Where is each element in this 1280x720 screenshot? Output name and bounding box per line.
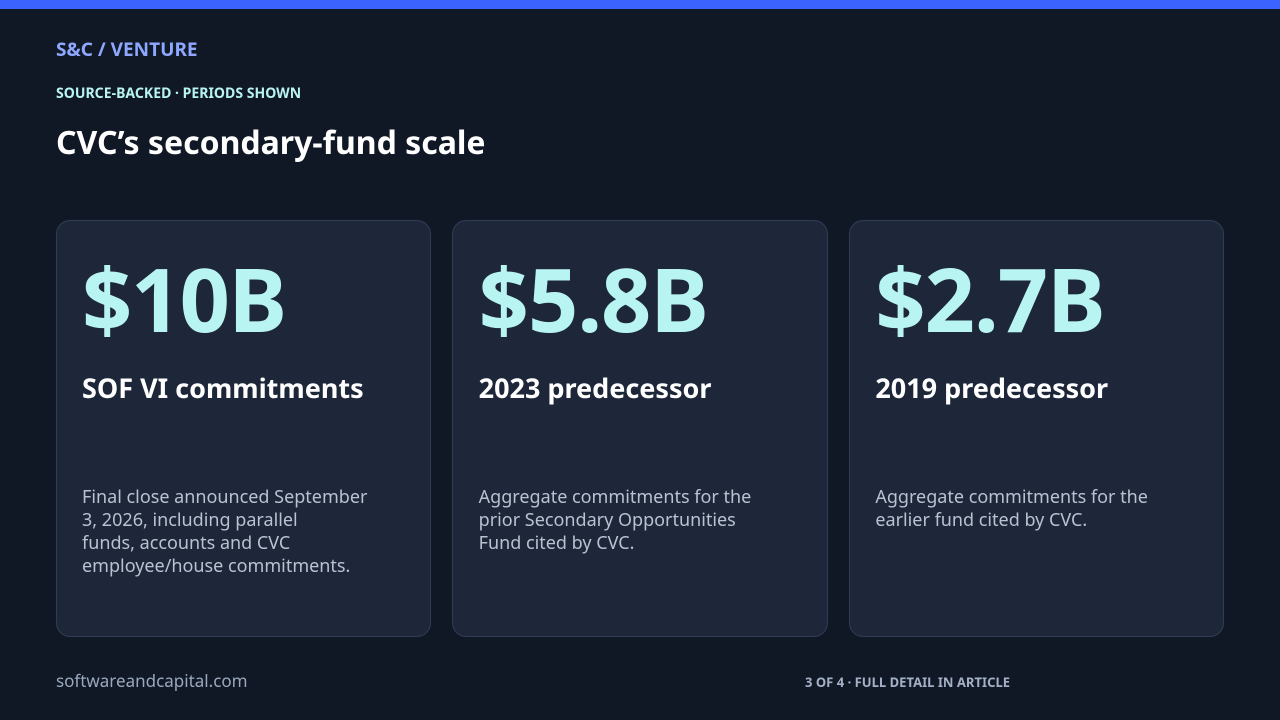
- footer site: softwareandcapital.com: [56, 669, 248, 692]
- panel: 2023 predecessor: [452, 220, 828, 637]
- stat: $10B: $10B: [82, 238, 286, 358]
- description: SOF VI: employee/house commitments.: [82, 554, 350, 578]
- description: 2019 fund: Aggregate commitments for the: [875, 485, 1148, 509]
- label: SOF VI commitments: SOF VI commitments: [82, 369, 364, 406]
- label: 2023 predecessor: 2023 predecessor: [479, 369, 711, 406]
- footer page note: 3 OF 4 · FULL DETAIL IN ARTICLE: [805, 673, 1010, 691]
- panel: SOF VI commitments: [56, 220, 431, 637]
- description: SOF VI: funds, accounts and CVC: [82, 531, 290, 555]
- panel: 2019 predecessor: [849, 220, 1224, 637]
- label: 2019 predecessor: 2019 predecessor: [875, 369, 1108, 406]
- eyebrow: SOURCE-BACKED · PERIODS SHOWN: [56, 84, 301, 103]
- title: CVC’s secondary-fund scale: [56, 121, 486, 164]
- description: 2023 fund: prior Secondary Opportunities: [479, 508, 736, 532]
- description: SOF VI: [82, 485, 368, 578]
- brand: S&C / VENTURE: [56, 36, 198, 62]
- description: 2019 fund: [875, 485, 1148, 532]
- description: SOF VI: Final close announced September: [82, 485, 367, 509]
- description: 2019 fund: earlier fund cited by CVC.: [875, 508, 1087, 532]
- stat: $5.8B: $5.8B: [479, 238, 708, 358]
- stat: $2.7B: $2.7B: [875, 238, 1105, 358]
- description: 2023 fund: Fund cited by CVC.: [479, 531, 634, 555]
- description: 2023 fund: [478, 485, 751, 555]
- top accent bar: [0, 0, 1280, 9]
- description: 2023 fund: Aggregate commitments for the: [479, 485, 751, 509]
- description: SOF VI: 3, 2026, including parallel: [82, 508, 298, 532]
